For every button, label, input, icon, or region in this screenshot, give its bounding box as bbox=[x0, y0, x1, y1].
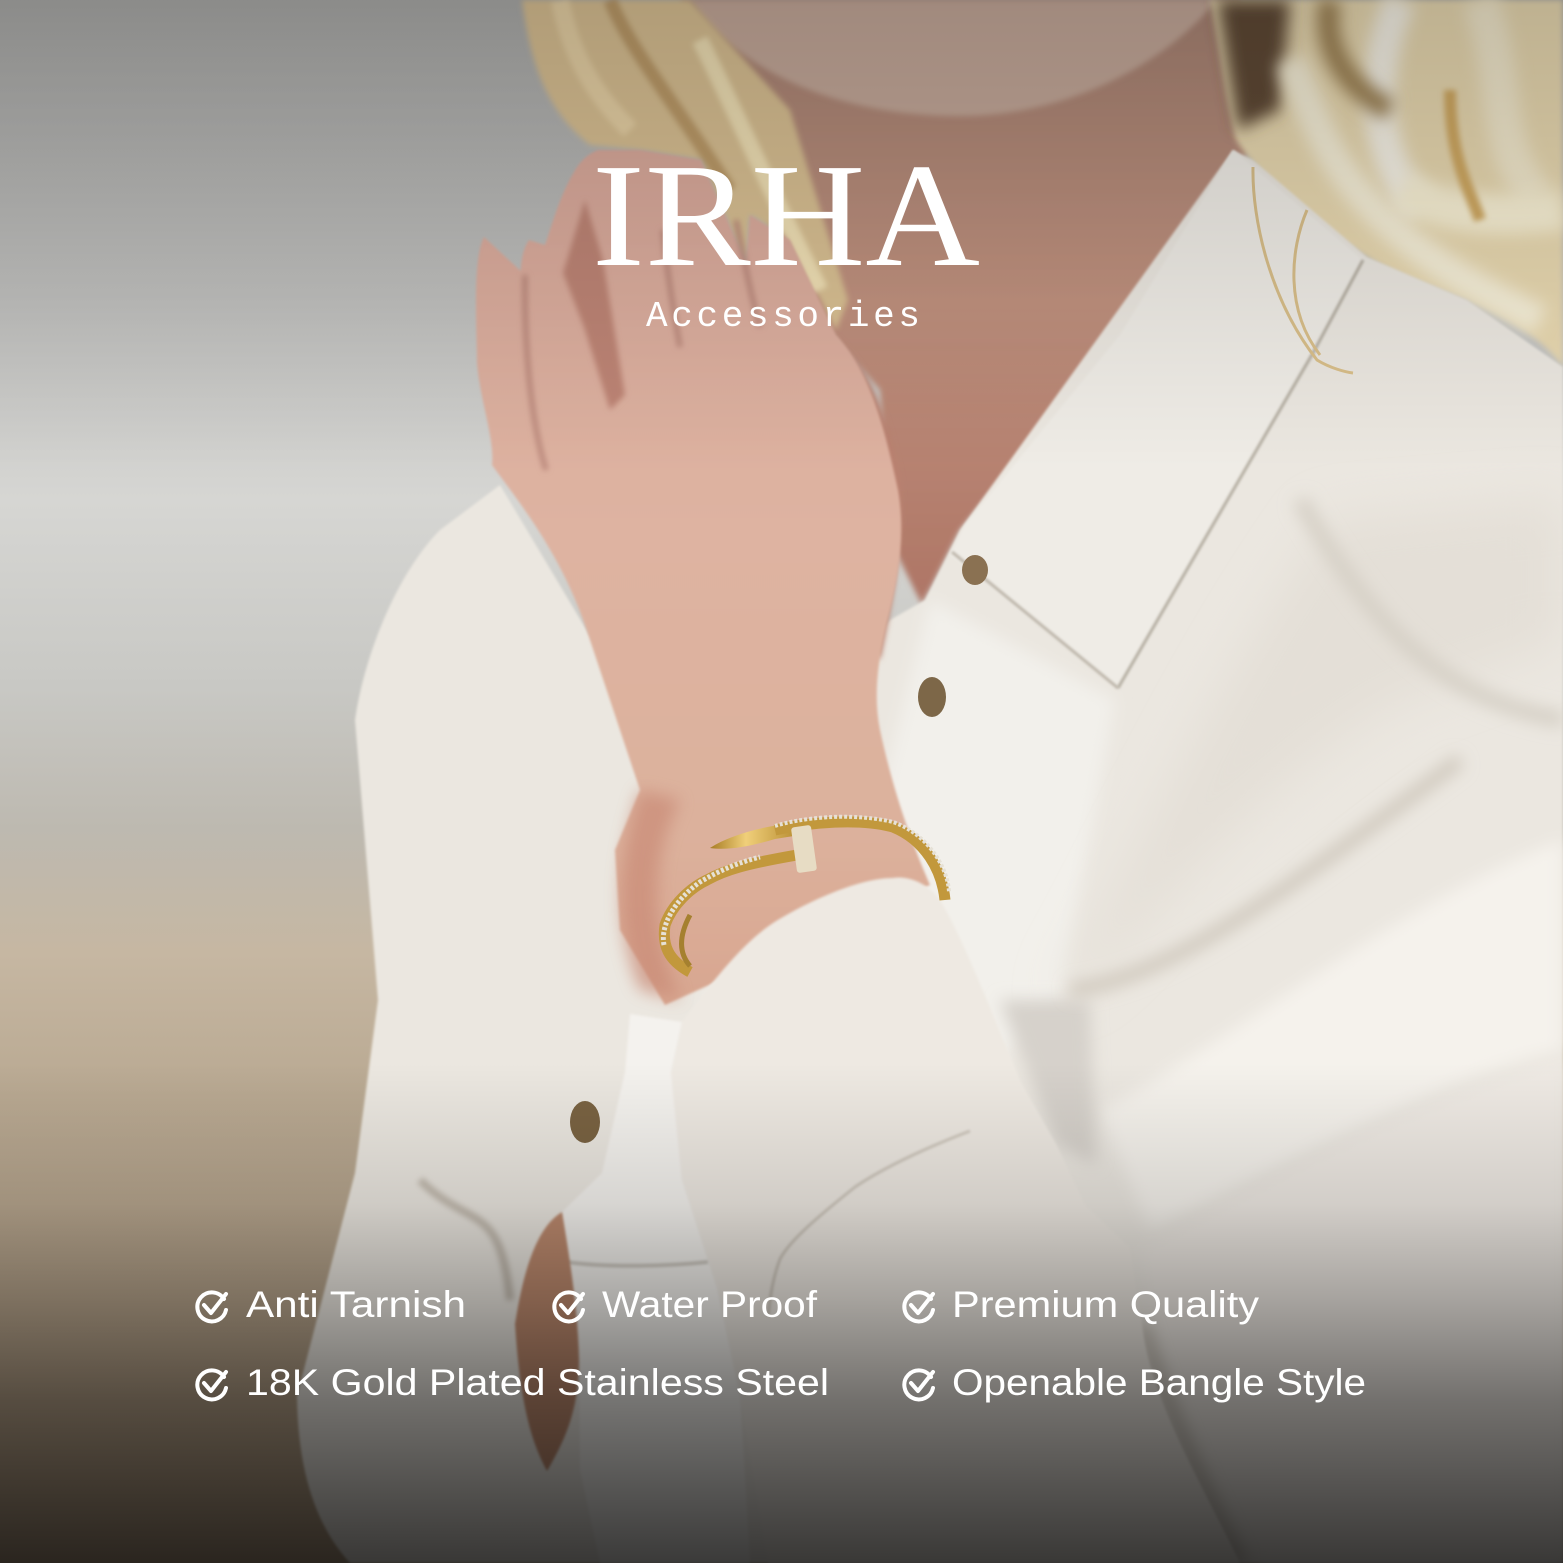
photo: finger separations bbox=[525, 200, 760, 470]
photo: buttons bbox=[570, 555, 988, 1143]
feature list bbox=[197, 1284, 1366, 1403]
photo: neck and chin bbox=[680, 0, 1250, 605]
title: IRHA bbox=[592, 134, 980, 298]
subtitle: Accessories bbox=[646, 296, 920, 337]
feature: premium quality: Premium Quality bbox=[952, 1284, 1260, 1325]
photo: hand and wrist bbox=[476, 150, 930, 1005]
photo: sleeve seam bbox=[768, 1131, 970, 1316]
photo: white linen shirt bbox=[297, 150, 1563, 1563]
photo: undershirt bbox=[562, 1014, 750, 1563]
icon: gold nail bangle bbox=[663, 817, 949, 972]
photo: hand behind bbox=[836, 337, 901, 660]
feature: anti tarnish: Anti Tarnish bbox=[246, 1284, 466, 1325]
photo: shirt placket gap bbox=[515, 1212, 579, 1471]
feature: openable bangle: Openable Bangle Style bbox=[952, 1362, 1366, 1403]
feature: gold plated: 18K Gold Plated Stainless Steel bbox=[246, 1362, 829, 1403]
photo: undershirt hem bbox=[566, 1262, 708, 1266]
feature: water proof: Water Proof bbox=[602, 1284, 818, 1325]
photo: left hair bbox=[522, 0, 848, 330]
photo: right hair bbox=[1210, 0, 1563, 367]
photo: shirt cuff and sleeve bbox=[671, 878, 1240, 1563]
photo: shirt collar bbox=[950, 150, 1363, 688]
photo: inner forearm shading bbox=[621, 790, 680, 1000]
